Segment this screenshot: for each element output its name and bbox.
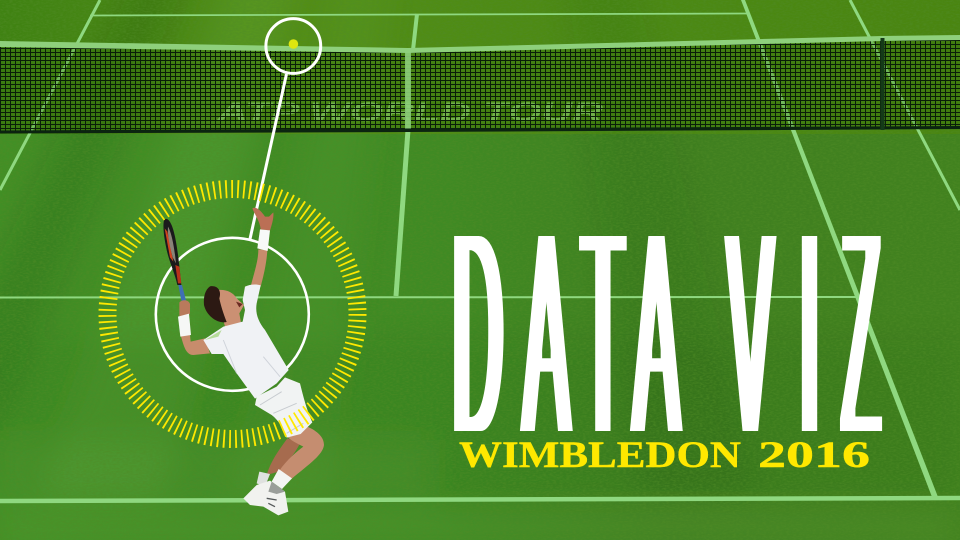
title: DATA VIZ: Z: [843, 169, 879, 499]
left wristband: [178, 314, 191, 337]
racket: [163, 219, 186, 301]
net text: ATP World Tour: ATP WORLD TOUR: [215, 97, 604, 127]
raised hand: [252, 208, 273, 231]
white target circle around the player: [156, 238, 309, 391]
face and neck: [218, 290, 244, 327]
raised arm: [251, 249, 267, 287]
subtitle: Wimbledon 2016: WIMBLEDON: [459, 435, 741, 476]
title: DATA VIZ: DATA VI: [453, 169, 819, 498]
left forearm: [181, 335, 210, 355]
ball highlight circle: [266, 19, 321, 73]
player serving: [163, 208, 324, 515]
subtitle: Wimbledon 2016: [459, 435, 870, 476]
subtitle: Wimbledon 2016: 2016: [758, 435, 870, 476]
tennis ball: [289, 39, 298, 49]
tennis net: [0, 35, 960, 134]
hair: [204, 286, 227, 322]
back leg: [267, 438, 300, 475]
shoes: [243, 481, 288, 515]
shirt: [203, 284, 289, 399]
front leg: [279, 425, 324, 479]
socks: [272, 469, 292, 489]
racket hand: [179, 300, 190, 317]
right wristband: [257, 229, 270, 251]
yellow tick ring: [108, 189, 358, 439]
shorts: [255, 377, 312, 438]
pointer line from ball to player: [250, 74, 286, 239]
